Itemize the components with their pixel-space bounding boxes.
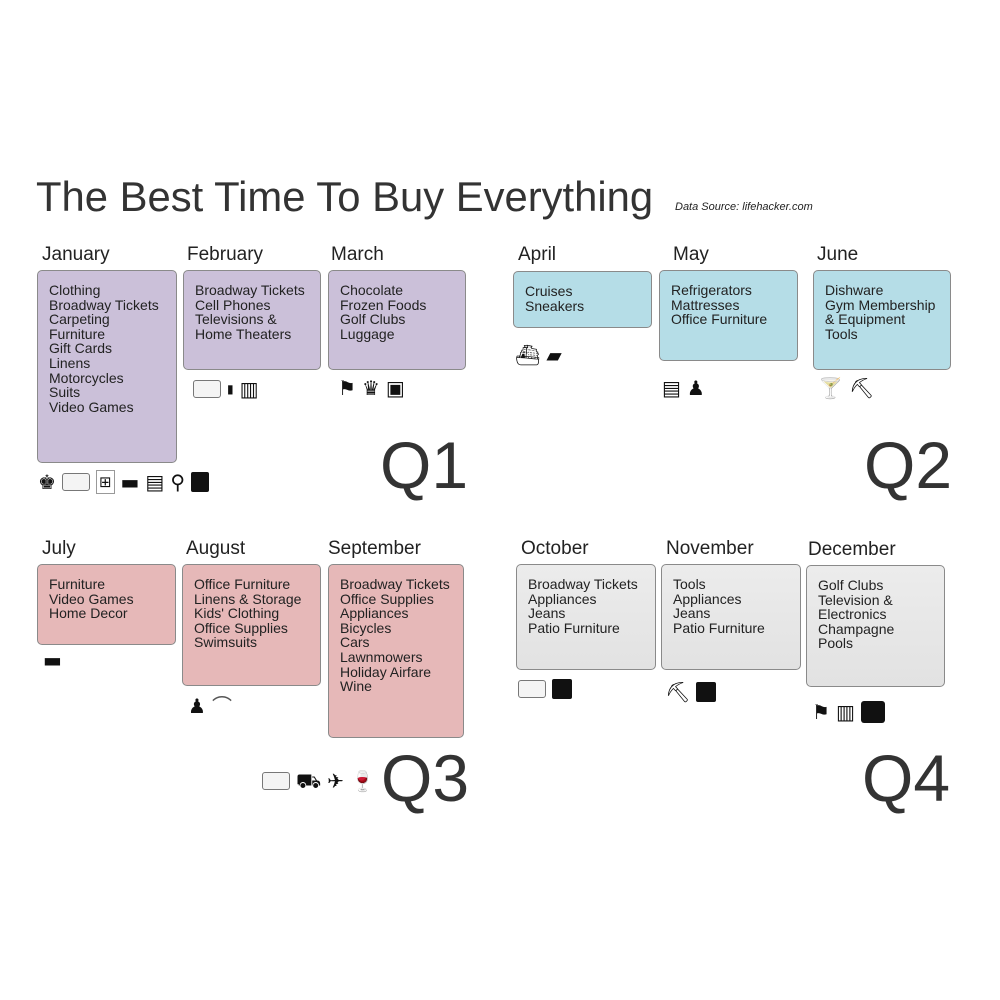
icons: January: ▤ — [145, 470, 164, 494]
panel: September: Wine — [340, 678, 372, 694]
panel: January: Furniture — [49, 326, 105, 342]
icons: June: 🍸 — [818, 376, 843, 400]
title: The Best Time To Buy Everything — [36, 173, 653, 220]
icons: May — [662, 376, 705, 400]
panel: December: Television & — [818, 592, 893, 608]
panel: April: Sneakers — [525, 298, 584, 314]
label: February: February — [187, 244, 263, 265]
panel: January: Suits — [49, 384, 80, 400]
icons: January — [38, 470, 209, 494]
icons: December: ▥ — [836, 700, 855, 724]
panel: September: Cars — [340, 634, 370, 650]
panel: May: Office Furniture — [671, 311, 767, 327]
panel: March: Luggage — [340, 326, 395, 342]
label: January: January — [42, 244, 110, 265]
panel: November: Patio Furniture — [673, 620, 765, 636]
panel: February: Broadway Tickets — [195, 282, 305, 298]
label: May: May — [673, 244, 709, 265]
panel: December: Champagne — [818, 621, 894, 637]
panel: January: Gift Cards — [49, 340, 112, 356]
icons: September: 🍷 — [350, 769, 375, 793]
icons: March: ▣ — [386, 376, 405, 400]
panel: April: Cruises — [525, 283, 572, 299]
panel: December — [806, 565, 945, 687]
panel: September: Lawnmowers — [340, 649, 422, 665]
icons: March — [338, 376, 405, 400]
panel: October: Patio Furniture — [528, 620, 620, 636]
icons: March: ♛ — [362, 376, 380, 400]
icons: January: ♚ — [38, 470, 56, 494]
panel: November: Tools — [673, 576, 706, 592]
panel: June: Dishware — [825, 282, 883, 298]
panel: March: Frozen Foods — [340, 297, 426, 313]
panel: March: Chocolate — [340, 282, 403, 298]
label: November: November — [666, 538, 754, 559]
icons: January: ⊞ — [99, 473, 112, 491]
panel: November: Jeans — [673, 605, 710, 621]
panel: August: Linens & Storage — [194, 591, 301, 607]
label: March: March — [331, 244, 384, 265]
panel: February: Televisions & — [195, 311, 277, 327]
panel: November: Appliances — [673, 591, 742, 607]
icons: May: ♟ — [687, 376, 705, 400]
panel: June: Tools — [825, 326, 858, 342]
icons: September — [262, 769, 375, 793]
panel: October — [516, 564, 656, 670]
panel: August: Office Furniture — [194, 576, 290, 592]
panel: September: Broadway Tickets — [340, 576, 450, 592]
panel: July: Furniture — [49, 576, 105, 592]
icons: April — [515, 343, 562, 367]
panel: May — [659, 270, 798, 361]
label: August: August — [186, 538, 245, 559]
icons: November: ⛏ — [665, 680, 690, 704]
panel: January: Carpeting — [49, 311, 110, 327]
icons: October — [518, 679, 572, 699]
icons: August — [188, 694, 232, 718]
label: April: April — [518, 244, 556, 265]
panel: August: Swimsuits — [194, 634, 257, 650]
icons: February: ▮ — [227, 382, 234, 396]
icons: June: ⛏ — [849, 376, 874, 400]
panel: August: Kids' Clothing — [194, 605, 279, 621]
panel: June: Gym Membership — [825, 297, 935, 313]
icons: March: ⚑ — [338, 376, 356, 400]
panel: October: Jeans — [528, 605, 565, 621]
label: October: October — [521, 538, 589, 559]
panel: September: Office Supplies — [340, 591, 434, 607]
panel: December: Pools — [818, 635, 853, 651]
panel: September: Bicycles — [340, 620, 391, 636]
icons: August: ♟ — [188, 694, 206, 718]
panel: March — [328, 270, 466, 370]
panel: August: Office Supplies — [194, 620, 288, 636]
panel: May: Refrigerators — [671, 282, 752, 298]
panel: June: & Equipment — [825, 311, 905, 327]
panel: September: Holiday Airfare — [340, 664, 431, 680]
icons: February — [193, 377, 259, 401]
icons: December — [812, 700, 885, 724]
panel: May: Mattresses — [671, 297, 739, 313]
icons: January: ▬ — [121, 470, 139, 494]
panel: June — [813, 270, 951, 370]
panel: April — [513, 271, 652, 328]
icons: September: ⛟ — [296, 769, 321, 793]
panel: July: Video Games — [49, 591, 134, 607]
label: June: June — [817, 244, 858, 265]
panel: December: Electronics — [818, 606, 886, 622]
panel: November — [661, 564, 801, 670]
label: July: July — [42, 538, 76, 559]
panel: January: Linens — [49, 355, 90, 371]
panel: July: Home Decor — [49, 605, 128, 621]
label: December: December — [808, 539, 896, 560]
panel: February: Home Theaters — [195, 326, 291, 342]
Q3: Q3 — [381, 741, 469, 815]
icons: September: ✈ — [327, 769, 344, 793]
icons: February: ▥ — [240, 377, 259, 401]
Q2: Q2 — [864, 428, 952, 502]
label: September: September — [328, 538, 421, 559]
panel: September — [328, 564, 464, 738]
panel: January: Clothing — [49, 282, 100, 298]
panel: February: Cell Phones — [195, 297, 270, 313]
panel: January: Video Games — [49, 399, 134, 415]
panel: October: Appliances — [528, 591, 596, 607]
data source: Data Source: lifehacker.com — [675, 201, 813, 213]
panel: August — [182, 564, 321, 686]
panel: March: Golf Clubs — [340, 311, 405, 327]
panel: January — [37, 270, 177, 463]
panel: October: Broadway Tickets — [528, 576, 638, 592]
panel: September: Appliances — [340, 605, 408, 621]
Q1: Q1 — [380, 428, 468, 502]
icons: August: ⌒ — [212, 694, 232, 718]
panel: December: Golf Clubs — [818, 577, 883, 593]
icons: April: ▰ — [546, 343, 562, 367]
panel: February — [183, 270, 321, 370]
panel: July — [37, 564, 176, 645]
icons: December: ⚑ — [812, 700, 830, 724]
Q4: Q4 — [862, 741, 950, 815]
panel: January: Motorcycles — [49, 370, 124, 386]
icons: April: ⛴ — [515, 343, 540, 367]
panel: January: Broadway Tickets — [49, 297, 159, 313]
icons: November — [665, 680, 716, 704]
icons: January: ⚲ — [170, 470, 185, 494]
icons: July: ▬ — [43, 648, 62, 672]
icons: June — [818, 376, 874, 400]
icons: May: ▤ — [662, 376, 681, 400]
